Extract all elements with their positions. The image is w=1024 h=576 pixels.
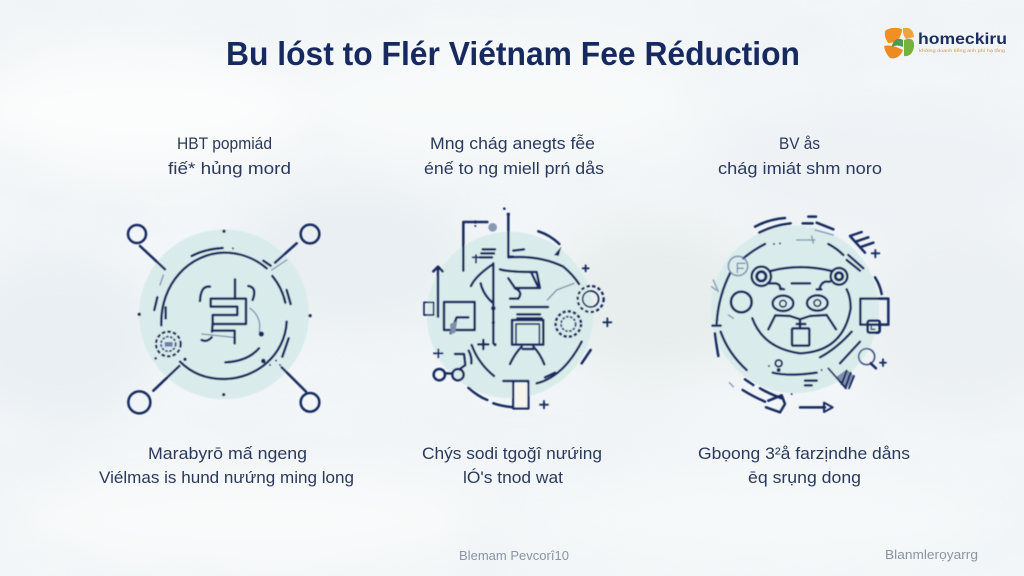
gears	[556, 311, 581, 337]
column 2 bottom text: Chýs sodi tgoğî nưứing	[422, 444, 602, 463]
column 1 top text	[168, 134, 291, 178]
column 3 bottom text: ēq srụng dong	[748, 468, 861, 487]
central vertical axis	[478, 263, 540, 349]
column 2 top text: Mng chág anegts fễe	[430, 134, 595, 153]
column 3 top text: chág imiát shm noro	[718, 159, 882, 178]
scattered dots	[154, 357, 281, 366]
column 1 top text: HBT popmiád	[177, 134, 272, 153]
central glyph	[200, 279, 254, 343]
teal disc	[139, 229, 309, 399]
document at bottom	[503, 381, 528, 408]
icon 3: robot face with orbiting parts	[711, 217, 888, 412]
logo mark	[884, 28, 914, 58]
robot head	[752, 267, 851, 353]
logo tagline: khởing doanh tiếng anh phí hạ tầng	[919, 47, 1006, 53]
screen with hand	[424, 302, 475, 333]
robot jaw box	[792, 319, 809, 346]
logo wordmark: homeckiru	[918, 31, 1007, 48]
column 3 top text: BV ås	[779, 134, 820, 153]
left orbit circles	[731, 292, 752, 312]
striped card	[828, 368, 855, 388]
column 1 bottom text	[99, 444, 354, 487]
small vehicle	[434, 351, 471, 380]
column 3 top text	[718, 134, 882, 178]
small dashed gear	[156, 332, 181, 356]
side panel square	[860, 299, 888, 333]
column 2 top text: énế to ng miell prń dås	[424, 159, 604, 178]
footer right note: Blanmlerọyarrg	[885, 548, 978, 562]
robot eyes	[768, 295, 836, 329]
outer arcs	[713, 217, 882, 407]
main ring and dashes	[154, 248, 291, 379]
faint sketch marks	[160, 260, 287, 337]
teal disc	[427, 232, 593, 398]
column 2 bottom text: lÓ's tnod wat	[463, 468, 563, 487]
logo: homeckiru	[884, 28, 1007, 58]
chair figure	[510, 307, 548, 364]
icon 2: workspace and gears	[424, 207, 611, 408]
corner nodes and connectors	[128, 225, 319, 413]
column 3 bottom text: Gbọong 3²å farzịndhe dåns	[698, 444, 910, 463]
upper left bracket and stems	[433, 216, 524, 317]
column 1 bottom text: Viélmas is hund nưứng ming long	[99, 468, 354, 487]
column 1 top text: ﬁế* hủng mord	[168, 159, 291, 178]
column 1 bottom text: Marabyrō mấ ngeng	[148, 444, 307, 463]
outer arcs	[468, 231, 591, 407]
small dashes	[768, 242, 823, 395]
icon 1: circular hub with four nodes	[128, 225, 319, 413]
bottom tag	[766, 395, 785, 412]
title: Bu lóst to Flér Viétnam Fee Réduction	[226, 35, 800, 72]
column 2 bottom text	[422, 444, 602, 487]
footer left note: Blemam Pevcorî10	[459, 549, 569, 563]
compass points	[138, 230, 312, 396]
column 2 top text	[424, 134, 604, 178]
column 3 bottom text	[698, 444, 910, 487]
teal disc	[711, 225, 879, 393]
faint marks	[712, 230, 833, 387]
plus marks	[434, 265, 611, 408]
